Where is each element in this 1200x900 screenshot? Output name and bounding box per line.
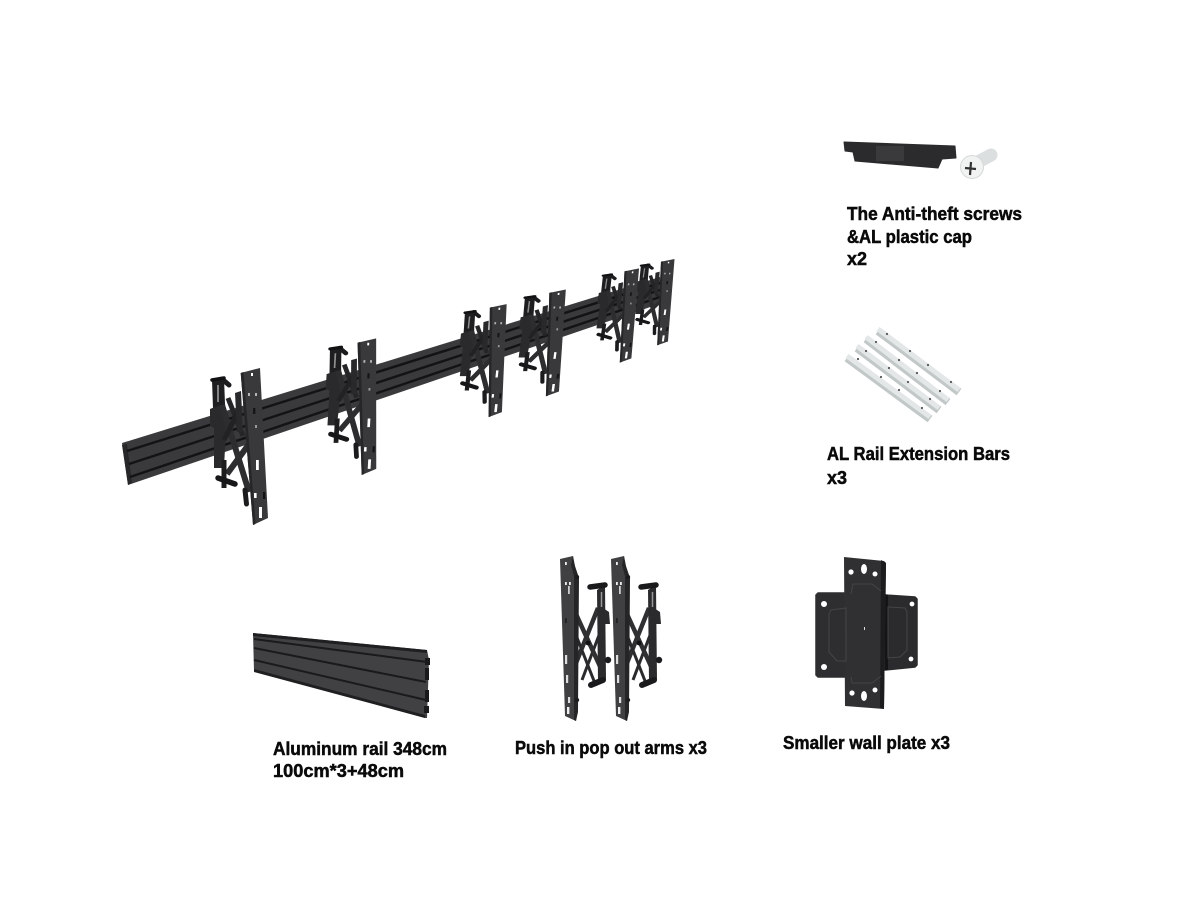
label: anti-theft screws: The Anti-theft screws <box>847 204 1022 224</box>
arm 3 <box>452 304 513 417</box>
arm 1 <box>210 368 268 525</box>
arm 2 <box>321 338 384 475</box>
label: aluminum rail: 100cm*3+48cm <box>273 761 404 781</box>
label: aluminum rail <box>273 739 447 781</box>
icon: anti-theft plastic cap <box>844 142 956 168</box>
label: wall plate: Smaller wall plate x3 <box>783 733 950 753</box>
assembled wall mount: rail with six arms <box>122 259 680 525</box>
icon: rail extension bars <box>847 329 959 419</box>
icon: aluminum rail section <box>253 633 430 718</box>
label: anti-theft screws: x2 <box>847 249 867 269</box>
long aluminum rail <box>122 277 662 485</box>
arm 6 <box>628 259 680 345</box>
arm 4 <box>510 290 572 396</box>
icon: smaller wall plate <box>816 557 917 709</box>
label: extension bars <box>827 444 1010 488</box>
label: anti-theft screws: &AL plastic cap <box>847 227 972 247</box>
arm 5 <box>588 268 645 363</box>
icon: push in pop out arm left <box>560 556 611 721</box>
label: anti-theft screws <box>847 204 1022 269</box>
icon: anti-theft screw <box>960 155 991 178</box>
label: extension bars: AL Rail Extension Bars <box>827 444 1010 464</box>
icon: push in pop out arm right <box>611 556 662 721</box>
label: aluminum rail: Aluminum rail 348cm <box>273 739 447 759</box>
label: extension bars: x3 <box>827 468 847 488</box>
label: push in pop out arms: Push in pop out arms x3 <box>515 738 707 758</box>
